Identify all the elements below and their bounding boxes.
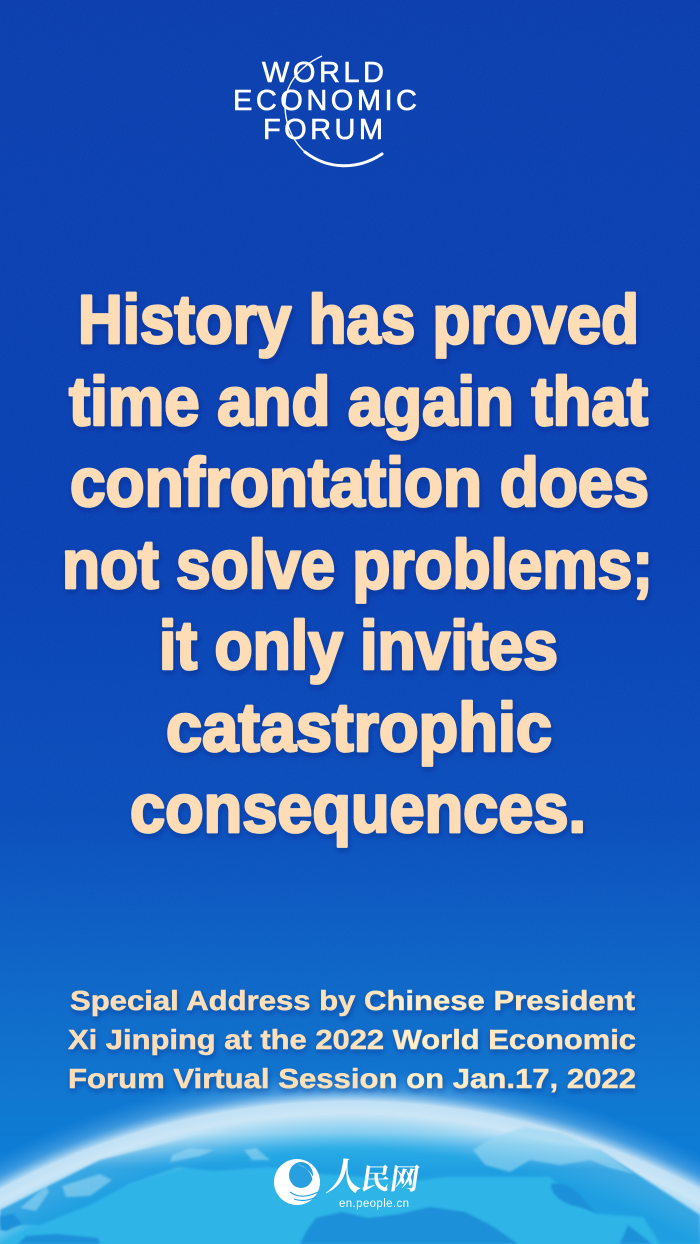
headline quote: time and again that (69, 363, 648, 440)
logo Chinese name (323, 1146, 423, 1201)
logo wordmark: FORUM (263, 114, 383, 146)
map: darker seas (0, 1183, 652, 1244)
headline quote: confrontation does (70, 444, 649, 521)
source caption: Forum Virtual Session on Jan.17, 2022 (68, 1063, 636, 1094)
logo wordmark: WORLD (262, 57, 384, 89)
headline quote (62, 281, 653, 847)
headline quote: History has proved (78, 281, 639, 358)
headline quote: catastrophic (166, 689, 552, 766)
logo Chinese name: 网 (388, 1156, 423, 1198)
source caption (68, 985, 636, 1094)
World Economic Forum logo (233, 56, 417, 166)
headline quote: it only invites (159, 607, 558, 684)
source caption: Special Address by Chinese President (70, 985, 635, 1016)
logo web address: en.people.cn (339, 1198, 409, 1210)
map: ocean (0, 1135, 700, 1244)
logo wordmark: ECONOMIC (233, 85, 417, 117)
headline quote: not solve problems; (62, 526, 653, 603)
People's Daily Online logo (274, 1146, 423, 1210)
logo wordmark (233, 57, 417, 146)
map: light land masses (20, 1127, 634, 1211)
logo arc (285, 56, 322, 152)
globe (0, 1040, 700, 1244)
logo Chinese name: 人 (323, 1146, 367, 1201)
logo emblem (274, 1159, 320, 1205)
logo Chinese name: 民 (359, 1156, 394, 1198)
source caption: Xi Jinping at the 2022 World Economic (68, 1024, 636, 1055)
headline quote: consequences. (130, 770, 586, 847)
